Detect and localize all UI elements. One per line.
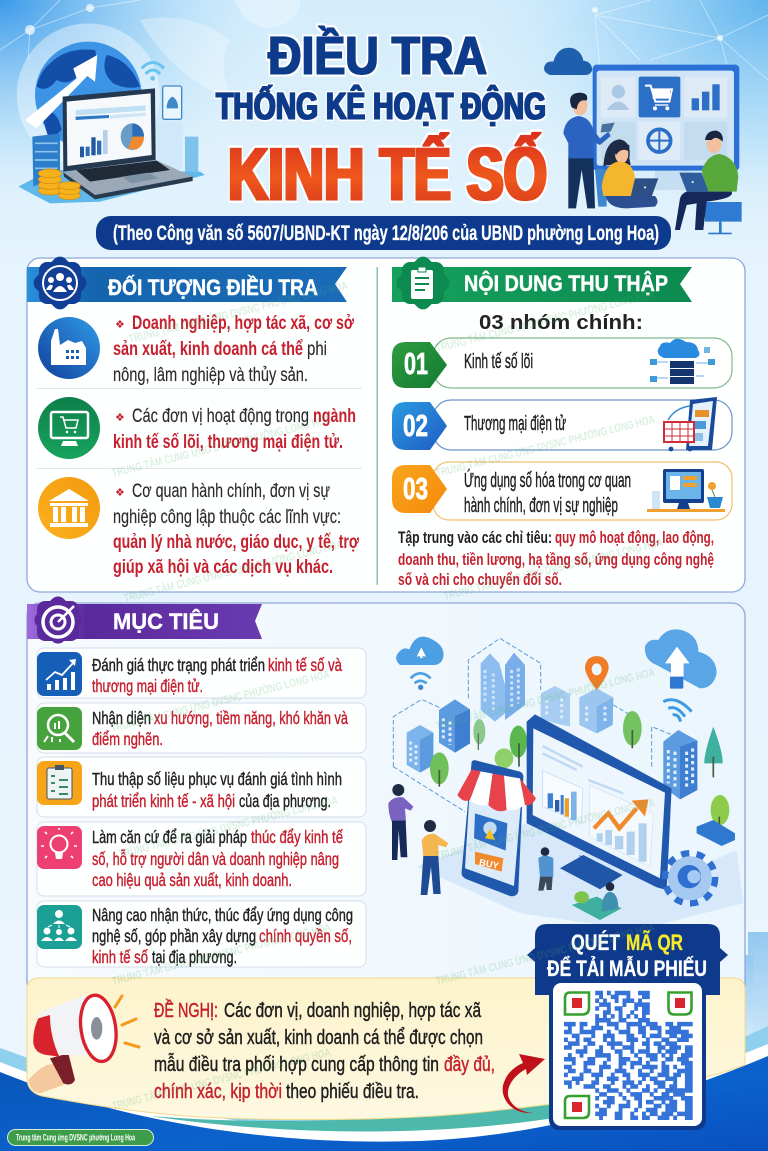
QR heading: MÃ QR — [626, 930, 683, 955]
objective 5: nghệ số, góp phần xây dựng — [92, 926, 256, 946]
objective 1: kinh tế số và — [268, 655, 342, 675]
buildings — [407, 653, 697, 799]
heading: objectives: MỤC TIÊU — [113, 609, 219, 634]
objective 3: phát triển kinh tế - xã hội — [92, 791, 235, 811]
watermark: TRUNG TÂM CUNG ỨNG DVSNC PHƯỜNG LONG HOA — [443, 536, 664, 603]
group 02: Thương mại điện tử — [464, 413, 566, 435]
objective rows background cards — [37, 648, 366, 967]
panel: objectives — [27, 603, 745, 995]
text: public agencies: Cơ quan hành chính, đơn vị sự — [132, 481, 330, 502]
text: request: mẫu điều tra phối hợp cung cấp thông tin — [154, 1053, 439, 1076]
watermark: TRUNG TÂM CUNG ỨNG DVSNC PHƯỜNG LONG HOA — [435, 666, 656, 733]
footer label — [8, 1130, 154, 1146]
group 01: Kinh tế số lõi — [464, 351, 533, 373]
QR heading — [527, 924, 728, 995]
person: kneeling center — [538, 847, 553, 891]
watermark: TRUNG TÂM CUNG ỨNG DVSNC PHƯỜNG LONG HOA — [128, 279, 349, 346]
group 03: Ứng dụng số hóa trong cơ quan — [464, 469, 631, 492]
subtitle pill — [96, 216, 671, 250]
objective 5: Nâng cao nhận thức, thúc đẩy ứng dụng công — [92, 905, 353, 925]
QR heading: QUÉT — [571, 930, 620, 955]
group 03: hành chính, đơn vị sự nghiệp — [464, 495, 618, 517]
text: core digital units: ❖ — [115, 412, 125, 424]
text: public agencies: ❖ — [115, 487, 125, 499]
footer label: Trung tâm Cung ứng DVSNC phường Long Hoa — [16, 1132, 136, 1142]
text: enterprises: phi — [307, 339, 327, 360]
objective 2 — [37, 707, 348, 750]
objective 4 — [37, 826, 343, 890]
text: request: ĐỀ NGHỊ: — [154, 999, 218, 1022]
watermark: TRUNG TÂM CUNG ỨNG DVSNC PHƯỜNG LONG HOA — [111, 921, 332, 988]
panel heading: survey subjects: ĐỐI TƯỢNG ĐIỀU TRA — [108, 274, 318, 300]
objective 4: Làm căn cứ để ra giải pháp — [92, 827, 247, 847]
text: enterprises: ❖ — [115, 319, 125, 331]
title line 1: ĐIỀU TRA — [268, 26, 487, 86]
icon: online shopping monitor — [38, 397, 100, 459]
panel heading: collected content: NỘI DUNG THU THẬP — [464, 271, 668, 296]
title line 3: KINH TẾ SỐ — [228, 132, 547, 216]
icon: people network — [37, 905, 82, 949]
icon: computer on desk — [647, 469, 725, 512]
icon: magnifier — [37, 707, 82, 750]
panel heading: collected content — [392, 253, 692, 313]
objective 3 — [37, 761, 342, 811]
objective 2: xu hướng, tiềm năng, khó khăn và — [154, 708, 348, 728]
right cloud with upload arrow — [645, 629, 717, 722]
phone shop — [457, 760, 536, 896]
watermark — [110, 279, 664, 1113]
objective 2: điểm nghẽn. — [92, 729, 163, 749]
text: request: chính xác, kịp thời — [154, 1081, 282, 1103]
icon: light bulb — [37, 826, 82, 869]
watermark: TRUNG TÂM CUNG ỨNG DVSNC PHƯỜNG LONG HOA — [123, 538, 344, 605]
heading: objectives — [27, 593, 262, 647]
text: request: Các đơn vị, doanh nghiệp, hợp tác xã — [224, 1000, 482, 1022]
heading: three main groups: 03 nhóm chính: — [479, 312, 643, 334]
objective 1: Đánh giá thực trạng phát triển — [92, 655, 265, 675]
text: core digital units: kinh tế số lõi, thương mại điện tử. — [113, 432, 343, 453]
location pin — [585, 656, 609, 690]
icon: government building — [38, 477, 100, 539]
bottom wave — [0, 1026, 768, 1151]
group 02: 02 — [403, 408, 428, 443]
objective 2: Nhận diện — [92, 708, 151, 728]
title line 2: THỐNG KÊ HOẠT ĐỘNG — [216, 83, 546, 128]
group 01: 01 — [404, 346, 428, 381]
watermark: TRUNG TÂM CUNG ỨNG DVSNC PHƯỜNG LONG HOA — [435, 796, 656, 863]
objective 5 — [37, 905, 353, 967]
QR heading: ĐỂ TẢI MẪU PHIẾU — [547, 955, 707, 981]
illustration: digital city — [388, 629, 743, 930]
objective 3: của địa phương. — [239, 791, 331, 811]
group 03: 03 — [403, 471, 428, 506]
objective 1 — [37, 652, 342, 696]
icon: phone and cart — [664, 397, 717, 451]
person: sitting at desk — [572, 882, 622, 920]
watermark: TRUNG TÂM CUNG ỨNG DVSNC PHƯỜNG LONG HOA — [110, 668, 331, 735]
text: enterprises: nông, lâm nghiệp và thủy sản. — [113, 365, 308, 386]
objective 5: tại địa phương. — [152, 947, 237, 967]
text: focus indicators: số và chi cho chuyển đổi số. — [398, 571, 562, 589]
watermark: TRUNG TÂM CUNG ỨNG DVSNC PHƯỜNG LONG HOA — [435, 413, 656, 480]
text: enterprises — [113, 313, 354, 386]
objective 1: thương mại điện tử. — [92, 676, 203, 696]
group 02 — [392, 397, 732, 451]
phone shop: BUY — [478, 857, 500, 871]
text: core digital units: Các đơn vị hoạt động trong — [132, 406, 309, 427]
objective 4: số, hỗ trợ người dân và doanh nghiệp nâng — [92, 848, 339, 869]
illustration: people and dashboard — [544, 48, 742, 234]
watermark: TRUNG TÂM CUNG ỨNG DVSNC PHƯỜNG LONG HOA — [111, 413, 332, 480]
monitor stand — [560, 855, 623, 889]
objective 5: kinh tế số — [92, 947, 148, 967]
text: core digital units — [113, 406, 356, 453]
panel: request callout — [27, 978, 745, 1120]
panel: survey subjects and collected content — [27, 258, 745, 592]
watermark: TRUNG TÂM CUNG ỨNG DVSNC PHƯỜNG LONG HOA — [435, 288, 656, 355]
text: public agencies: giúp xã hội và các dịch vụ khác. — [113, 557, 333, 578]
text: enterprises: sản xuất, kinh doanh cá thể — [113, 339, 303, 360]
watermark: TRUNG TÂM CUNG ỨNG DVSNC PHƯỜNG LONG HOA — [435, 921, 656, 988]
icon: growth chart — [37, 652, 82, 696]
monitor — [527, 714, 672, 890]
QR code — [549, 983, 706, 1130]
text: public agencies — [113, 481, 359, 578]
icon: clipboard — [37, 761, 82, 805]
objective 4: cao hiệu quả sản xuất, kinh doanh. — [92, 870, 292, 890]
text: enterprises: Doanh nghiệp, hợp tác xã, cơ sở — [132, 313, 354, 334]
text: request: đầy đủ, — [444, 1054, 495, 1076]
person: purple sweater — [388, 784, 413, 860]
text: request: và cơ sở sản xuất, kinh doanh cá thể được chọn — [154, 1027, 483, 1049]
panel heading: survey subjects — [27, 253, 347, 313]
objective 3: Thu thập số liệu phục vụ đánh giá tình hình — [92, 769, 342, 789]
text: public agencies: nghiệp công lập thuộc các lĩnh vực: — [113, 507, 341, 528]
illustration: laptop with globe — [17, 23, 205, 203]
text: focus indicators: Tập trung vào các chỉ tiêu: — [398, 529, 552, 547]
group 01 — [392, 338, 732, 388]
trees — [430, 711, 735, 846]
watermark: TRUNG TÂM CUNG ỨNG DVSNC PHƯỜNG LONG HOA — [118, 794, 339, 861]
text: core digital units: ngành — [313, 406, 356, 427]
person: yellow shirt — [421, 820, 448, 895]
text: request: theo phiếu điều tra. — [286, 1081, 419, 1103]
icon: factory — [38, 317, 100, 379]
text: public agencies: quản lý nhà nước, giáo dục, y tế, trợ — [113, 532, 359, 553]
group 03 — [392, 462, 732, 520]
objective 5: chính quyền số, — [259, 926, 352, 946]
watermark: TRUNG TÂM CUNG ỨNG DVSNC PHƯỜNG LONG HOA — [111, 1046, 332, 1113]
text: request — [154, 999, 495, 1103]
icon: megaphone — [28, 993, 139, 1093]
left cloud and wifi — [396, 637, 444, 690]
skyline — [723, 932, 768, 1062]
text: focus indicators — [398, 529, 714, 589]
objective 4: thúc đẩy kinh tế — [251, 827, 343, 847]
arrow: to QR code — [503, 1054, 545, 1113]
icon: cloud server — [650, 339, 715, 384]
gear — [665, 854, 715, 903]
